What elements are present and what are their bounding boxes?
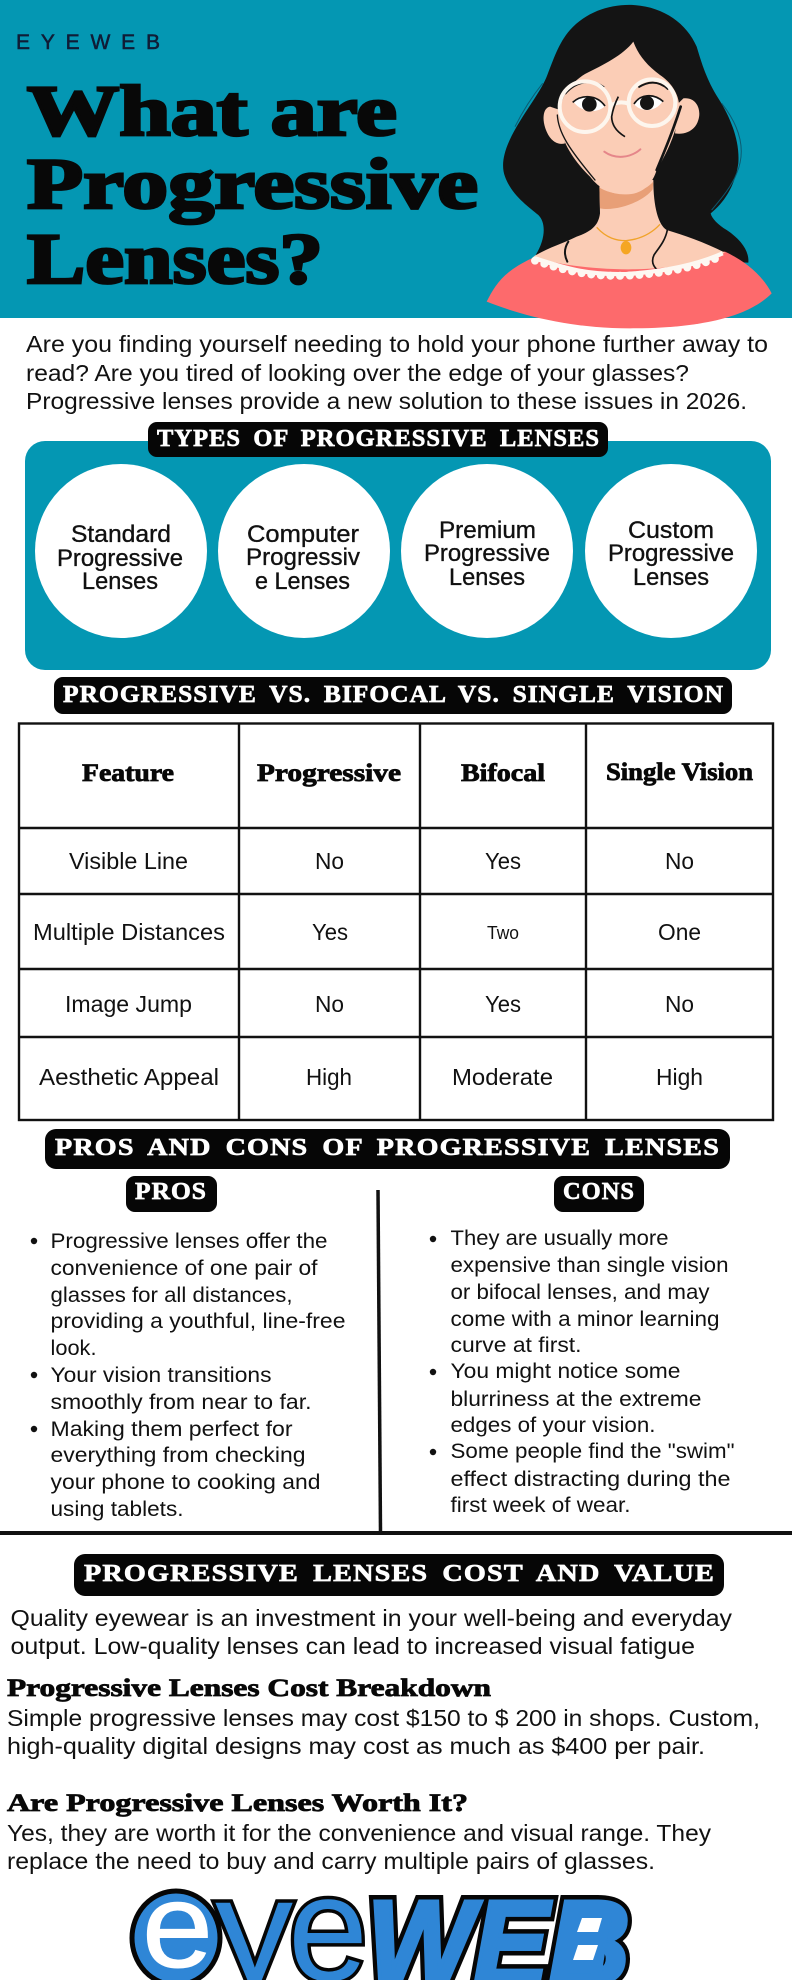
row: visible line: Yes [485, 848, 521, 874]
pros list: glasses for all distances, [50, 1284, 292, 1307]
row: image jump: Yes [485, 991, 521, 1017]
type: standard [35, 464, 207, 638]
heading: types: TYPES OF PROGRESSIVE LENSES [157, 426, 600, 452]
type: computer: e Lenses [255, 568, 350, 595]
intro paragraph: Are you finding yourself needing to hold your phone further away to [26, 331, 768, 357]
type: computer [218, 464, 390, 638]
cost breakdown text [7, 1705, 760, 1759]
cons list: blurriness at the extreme [450, 1388, 702, 1411]
title: What are [27, 71, 397, 151]
title: Progressive [27, 144, 478, 224]
cons list: effect distracting during the [450, 1468, 730, 1491]
cost intro paragraph [10, 1605, 733, 1659]
cons list: Some people find the "swim" [450, 1440, 734, 1463]
row: visible line: No [665, 848, 694, 874]
row: image jump: No [665, 991, 694, 1017]
heading: cost and value [74, 1554, 724, 1596]
row: image jump: Image Jump [65, 991, 192, 1017]
nose [612, 97, 625, 137]
heading: comparison: PROGRESSIVE VS. BIFOCAL VS. SINGLE VISION [63, 682, 724, 708]
pros label [126, 1176, 217, 1212]
illustration: woman with round glasses [487, 5, 772, 328]
pros list: Progressive lenses offer the [50, 1230, 328, 1253]
type: custom: Custom [628, 517, 714, 544]
row: multiple distances: One [658, 919, 701, 945]
pros list: look. [50, 1337, 96, 1360]
glasses [560, 79, 675, 132]
subheading: cost breakdown: Progressive Lenses Cost Breakdown [7, 1675, 491, 1702]
type: standard: Progressive [57, 545, 183, 572]
cons label: CONS [563, 1179, 635, 1205]
type: standard: Standard [71, 521, 171, 548]
title: Lenses? [27, 219, 323, 299]
ears [544, 98, 699, 144]
table header row: Bifocal [461, 760, 545, 787]
brand label: EYEWEB [16, 31, 160, 54]
worth it text: Yes, they are worth it for the convenience and visual range. They [7, 1820, 712, 1846]
comparison table [19, 723, 773, 1120]
pros list: everything from checking [50, 1444, 306, 1467]
collar [535, 253, 723, 276]
row: image jump [65, 991, 694, 1017]
neck and shoulders [533, 180, 725, 269]
cons list: come with a minor learning [450, 1308, 720, 1331]
row: aesthetic appeal [39, 1064, 703, 1090]
row: visible line: No [315, 848, 344, 874]
pros list: smoothly from near to far. [50, 1391, 312, 1414]
row: multiple distances: Multiple Distances [33, 919, 225, 945]
cons list: curve at first. [450, 1334, 582, 1357]
type: custom: Progressive [608, 540, 734, 567]
subheading: worth it: Are Progressive Lenses Worth It? [7, 1790, 468, 1817]
header banner [0, 0, 792, 318]
type: custom [585, 464, 757, 638]
type: computer: Progressiv [246, 544, 360, 571]
intro paragraph [26, 331, 768, 414]
pros label: PROS [135, 1179, 207, 1205]
row: multiple distances: Two [487, 923, 519, 943]
cons list: expensive than single vision [450, 1254, 728, 1277]
heading: pros and cons [45, 1129, 730, 1169]
eyebrows [565, 82, 668, 94]
cost intro paragraph: Quality eyewear is an investment in your well-being and everyday [10, 1605, 733, 1631]
table header row: Single Vision [606, 759, 753, 786]
intro paragraph: read? Are you tired of looking over the edge of your glasses? [26, 360, 689, 386]
cons list: They are usually more [450, 1227, 668, 1250]
pros list [31, 1230, 346, 1521]
face [559, 42, 679, 194]
row: multiple distances [33, 919, 701, 945]
row: aesthetic appeal: Aesthetic Appeal [39, 1064, 219, 1090]
pros list: convenience of one pair of [50, 1257, 318, 1280]
heading: pros and cons: PROS AND CONS OF PROGRESSIVE LENSES [55, 1135, 720, 1161]
cons list: edges of your vision. [450, 1414, 656, 1437]
cons list [430, 1227, 734, 1517]
type: computer: Computer [247, 521, 359, 548]
neck shadow [599, 182, 653, 209]
table header row: Progressive [257, 760, 401, 787]
pros list: using tablets. [50, 1498, 184, 1521]
necklace [597, 224, 660, 254]
cons list: You might notice some [450, 1360, 680, 1383]
cons list: first week of wear. [450, 1494, 630, 1517]
panel: types of progressive lenses [25, 422, 771, 670]
row: aesthetic appeal: High [306, 1064, 352, 1090]
pros list: Your vision transitions [50, 1364, 272, 1387]
pros list: providing a youthful, line-free [50, 1310, 346, 1333]
logo: eyeWEB [132, 1844, 630, 1980]
row: visible line [69, 848, 694, 874]
heading: cost and value: PROGRESSIVE LENSES COST AND VALUE [84, 1561, 715, 1587]
mouth [604, 149, 640, 157]
type: premium: Lenses [449, 564, 525, 591]
hair strands on face [557, 107, 681, 273]
cost intro paragraph: output. Low-quality lenses can lead to increased visual fatigue [10, 1633, 695, 1659]
row: aesthetic appeal: Moderate [452, 1064, 553, 1090]
pros list: your phone to cooking and [50, 1471, 320, 1494]
title [27, 71, 478, 299]
type: premium [401, 464, 573, 638]
worth it text: replace the need to buy and carry multiple pairs of glasses. [7, 1848, 655, 1874]
worth it text [7, 1820, 712, 1874]
pros list: Making them perfect for [50, 1418, 293, 1441]
cons list: or bifocal lenses, and may [450, 1281, 710, 1304]
type: premium: Progressive [424, 540, 550, 567]
eyes [573, 96, 663, 112]
heading: comparison [54, 677, 732, 714]
intro paragraph: Progressive lenses provide a new solution to these issues in 2026. [26, 388, 747, 414]
type: standard: Lenses [82, 568, 158, 595]
row: aesthetic appeal: High [656, 1064, 703, 1090]
row: multiple distances: Yes [312, 919, 348, 945]
table header row: Feature [82, 760, 174, 787]
shirt [487, 252, 772, 328]
type: custom: Lenses [633, 564, 709, 591]
hair [503, 5, 748, 263]
cost breakdown text: high-quality digital designs may cost as much as $400 per pair. [7, 1733, 705, 1759]
row: visible line: Visible Line [69, 848, 188, 874]
cost breakdown text: Simple progressive lenses may cost $150 to $ 200 in shops. Custom, [7, 1705, 760, 1731]
table header row [82, 759, 753, 787]
cons label [554, 1176, 644, 1212]
row: image jump: No [315, 991, 344, 1017]
type: premium: Premium [439, 517, 536, 544]
